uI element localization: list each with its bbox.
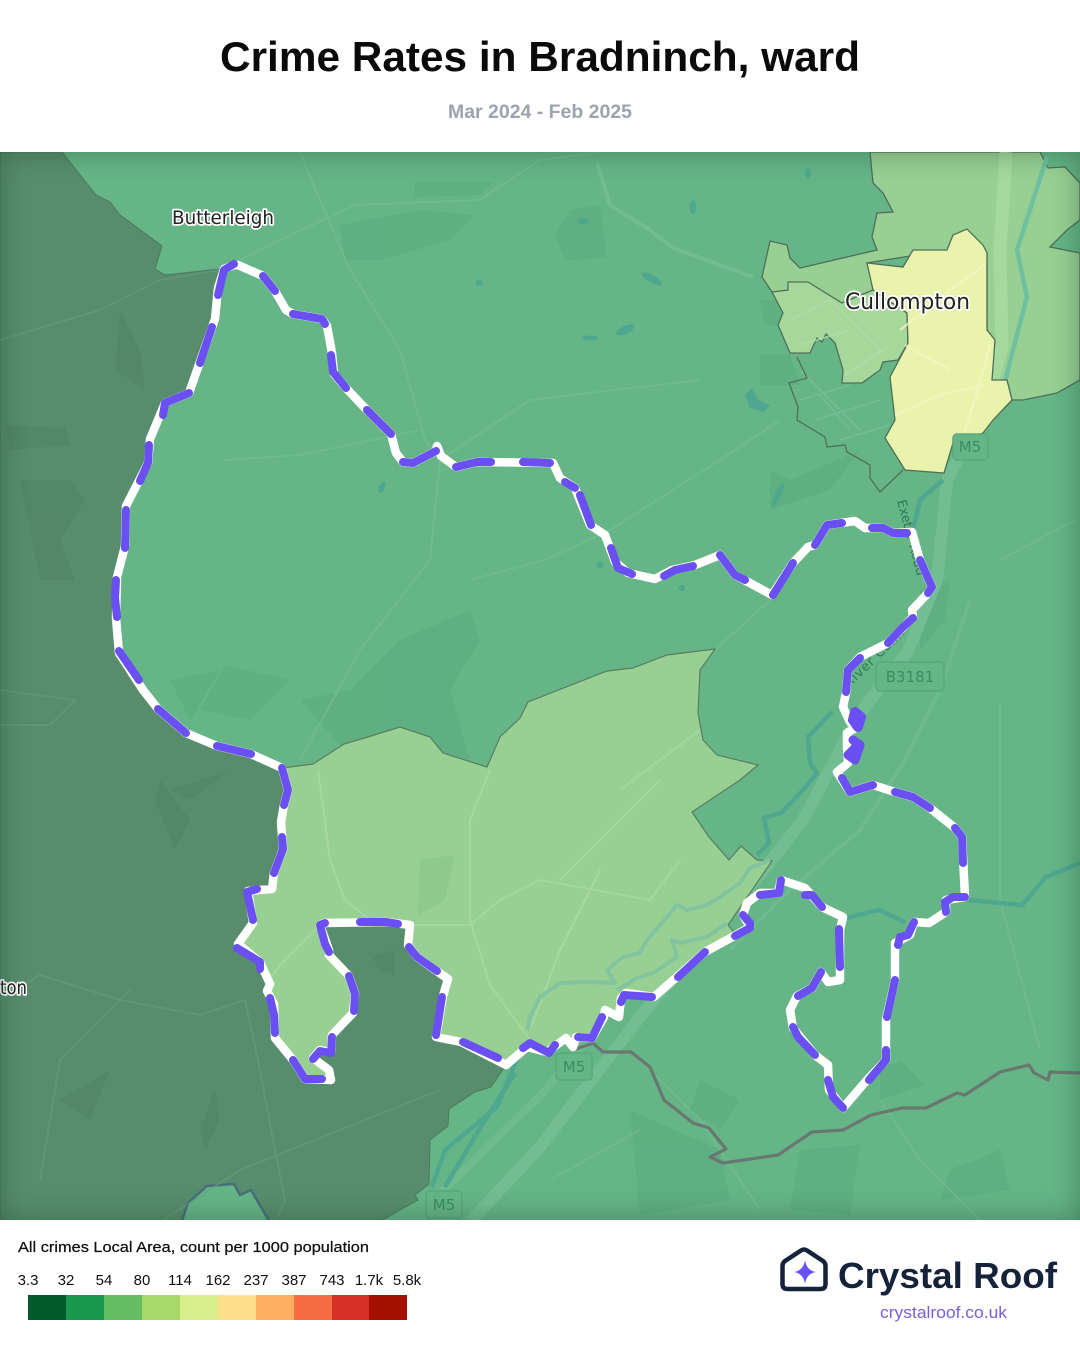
road shields <box>426 434 988 1218</box>
road shields: M5 <box>433 1196 455 1214</box>
legend <box>18 1239 422 1320</box>
legend tick labels: 32 <box>58 1272 74 1289</box>
legend colour scale <box>28 1295 407 1320</box>
legend tick labels: 387 <box>281 1272 307 1289</box>
subtitle: date range: Mar 2024 - Feb 2025 <box>448 102 632 123</box>
neighbouring ward: west lobe of Cullompton <box>772 282 908 383</box>
icon: Crystal Roof house logo <box>782 1250 826 1289</box>
place label: partial town name at left edge: ton <box>0 977 27 999</box>
Cullompton centre yellow area <box>867 229 1012 473</box>
dark area west of the ward <box>0 152 506 1222</box>
map edge vignette <box>0 152 1080 1220</box>
neighbouring ward: north-east light area <box>762 152 1080 400</box>
legend tick labels: 54 <box>96 1272 112 1289</box>
brand name: Crystal Roof <box>838 1255 1058 1296</box>
title: Crime Rates in Bradninch, ward <box>220 33 860 80</box>
legend tick labels: 237 <box>243 1272 269 1289</box>
choropleth map: River Culm <box>841 626 908 691</box>
choropleth map <box>0 152 1080 1226</box>
thin ward boundaries south of Cullompton <box>789 357 903 492</box>
major road north-west of Cullompton <box>597 163 753 277</box>
Cullompton street detail <box>895 265 990 445</box>
light region detail <box>268 730 700 1040</box>
motorway and river across the light area <box>992 152 1047 390</box>
website url: crystalroof.co.uk <box>880 1304 1008 1322</box>
legend tick labels: 114 <box>168 1272 192 1289</box>
ponds <box>377 168 811 591</box>
legend tick labels: 5.8k <box>393 1272 422 1289</box>
south boundary line <box>573 1043 1080 1163</box>
place label: Butterleigh: Butterleigh <box>172 207 274 229</box>
legend tick labels: 162 <box>205 1272 231 1289</box>
legend tick labels: 3.3 <box>18 1272 38 1289</box>
hill area at south edge <box>181 1182 270 1220</box>
motorway M5 and main road <box>433 417 980 1222</box>
road and river labels: Exeter Road <box>893 498 928 577</box>
minor roads <box>220 152 1075 1220</box>
ward boundary: purple dashes <box>115 264 965 1108</box>
legend tick labels: 80 <box>134 1272 150 1289</box>
legend tick labels: 1.7k <box>355 1272 384 1289</box>
rivers <box>432 480 1080 1187</box>
dark area patches and roads <box>5 310 395 1150</box>
road shields: M5 <box>563 1058 585 1076</box>
ward boundary: white base line <box>116 265 965 1108</box>
legend tick labels: 743 <box>319 1272 345 1289</box>
forest patches in the surrounding area <box>170 182 1010 1215</box>
ward light region <box>238 649 772 1080</box>
road shields: M5 <box>959 438 981 456</box>
legend title: All crimes Local Area, count per 1000 population <box>18 1239 369 1256</box>
legend tick labels <box>18 1272 422 1289</box>
place label: Cullompton: Cullompton <box>845 290 970 315</box>
road shields: B3181 <box>886 668 934 686</box>
